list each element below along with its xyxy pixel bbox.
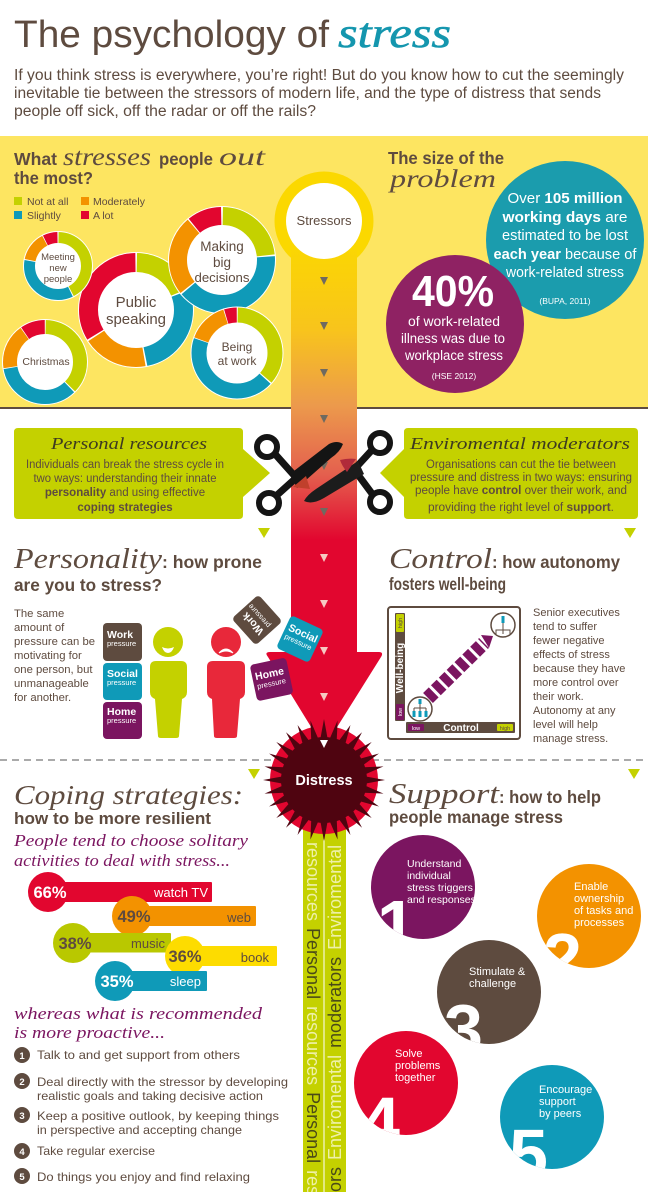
text: solitary activities: People tend to choose solitary [13,831,249,850]
legend: Not at all [27,196,68,208]
intro text: If you think stress is everywhere, you’re right! But do you know how to cut the seemingly [14,67,624,84]
panel: personal resources: Individuals can break the stress cycle in [26,459,224,471]
list: recommended actions: 4 [19,1147,25,1158]
bar: book 36%: book [241,950,269,965]
heading: coping strategies [14,780,243,828]
heading: personality: are you to stress? [14,575,162,595]
circle 1: triggers: and responses [407,894,476,906]
callout: 40% of work-related illness [386,255,524,393]
panel: personal resources: personality and using effective [45,487,205,499]
bar: watch TV 66%: watch TV [153,885,208,900]
donut: public speaking [78,252,194,368]
circle 2: ownership: 2 [543,919,582,997]
circle 1: triggers: individual [407,870,451,882]
donut: meeting new people: Meeting [41,252,75,263]
heading: support: : how to help [499,787,601,807]
circle 3: stimulate [437,940,541,1044]
heading: what stresses people out: out [219,144,267,171]
text: autonomy explanation: their work. [533,691,584,703]
circle 2: ownership: ownership [574,893,624,905]
heading: control: fosters well-being [389,574,506,594]
circle 4: solve problems: together [395,1072,436,1084]
list: recommended actions: Keep a positive outlook, by keeping things [37,1109,279,1123]
callout: 105 million working days [486,161,644,319]
heading: support: Support [389,778,500,810]
legend: Slightly [27,210,62,222]
bar: sleep 35%: sleep [170,974,201,989]
icon: scissors [257,433,390,513]
circle 5: peers: support [539,1096,576,1108]
callout: 40% of work-related illness: 40% [412,267,494,316]
circle 5: peers: 5 [509,1115,548,1192]
donut: christmas: Christmas [22,356,70,368]
text: autonomy explanation: fewer negative [533,635,605,647]
heading: personality: Personality [13,543,162,575]
heading: the size of the problem: problem [387,166,496,193]
text: autonomy explanation: because they have [533,663,625,675]
pressure blocks falling: Work [240,610,266,637]
panel: personal resources: coping strategies [77,502,173,514]
bar chart: coping activities [28,872,277,1001]
callout: 105 million working days: working days are [501,210,628,226]
bar: book 36% [165,936,277,976]
donut: meeting new people: new [49,263,67,274]
donut: making big decisions: decisions [194,270,250,285]
callout: 105 million working days: each year because of [494,247,637,263]
circle 1: triggers: stress triggers [407,882,473,894]
panel: environmental moderators: providing the right level of support. [428,502,614,514]
panel: environmental moderators: Organisations can cut the tie between [426,459,616,471]
text: autonomy explanation: more control over [533,677,619,689]
pressure blocks falling: Social [286,622,320,646]
text: pressure explanation: The same [14,608,64,620]
heading: what stresses people out: the most? [14,168,93,188]
circle 2: ownership: Enable [574,881,608,893]
circle 4: solve problems: problems [395,1060,441,1072]
text: autonomy explanation: Senior executives [533,607,620,619]
arrow: stressors to distress: Stressors [297,213,352,228]
text: solitary activities: activities to deal with stress... [14,851,230,870]
callout: 105 million working days: Over 105 million [508,191,622,207]
circle 2: ownership: processes [574,917,625,929]
heading: what stresses people out: stresses [63,144,151,171]
donut: public speaking: speaking [106,311,166,328]
text: pressure explanation: amount of [14,622,65,634]
legend: A lot [93,210,114,222]
donut: meeting new people: people [44,274,72,285]
donut: making big decisions [168,206,276,314]
circle 3: stimulate: 3 [444,990,483,1068]
pressure blocks falling: Home [254,665,285,683]
panel: personal resources: two ways: understanding their innate [34,473,216,485]
donut: being at work: Being [222,340,252,354]
panel: yellow background [0,136,648,408]
heading: support: people manage stress [389,807,563,827]
bar: web 49%: 49% [117,908,151,926]
list: recommended actions: 2 [19,1077,25,1088]
legend: Moderately [93,196,146,208]
banner: resources and moderators: ors Enviromental moderators Enviromental [325,845,345,1192]
text: pressure explanation: for another. [14,692,71,704]
text: autonomy explanation [533,607,625,745]
list: recommended actions [14,1047,288,1184]
dashed divider [0,759,648,761]
text: recommended: is more proactive... [14,1023,165,1042]
donut: making big decisions: Making [200,239,244,254]
circle 5: peers [500,1065,604,1169]
chart: control vs well-being [388,607,520,739]
title [14,11,451,57]
donut: making big decisions: big [213,255,231,270]
bar: sleep 35%: 35% [100,973,134,991]
text: pressure explanation: pressure can be [14,636,95,648]
chart: control vs well-being: low [398,708,404,716]
bar: web 49%: web [226,910,251,925]
intro text: people off sick, off the radar or off the rails? [14,103,316,120]
text: pressure explanation: unmanageable [14,678,89,690]
chart: control vs well-being: Control [443,723,479,734]
circle 4: solve problems: Solve [395,1048,423,1060]
circle 1: triggers: 1 [377,886,416,964]
text: pressure explanation: one person, but [14,664,93,676]
circle 3: stimulate: Stimulate & [469,966,526,978]
circle 1: triggers [371,835,475,939]
intro text [14,67,624,120]
donut: public speaking: Public [116,294,157,311]
intro text: inevitable tie between the stressors of modern life, and the type of distress that sends [14,85,601,102]
list: recommended actions: Take regular exercise [37,1144,155,1158]
chart: control vs well-being: high [398,618,404,628]
icon: section markers [248,528,640,779]
heading: control [389,543,620,594]
text: autonomy explanation: manage stress. [533,733,608,745]
text: autonomy explanation: Autonomy at any [533,705,616,717]
text: pressure explanation: motivating for [14,650,82,662]
circle 3: stimulate: challenge [469,978,516,990]
title: The psychology of [14,14,329,56]
circle 5: peers: Encourage [539,1084,592,1096]
text: autonomy explanation: effects of stress [533,649,610,661]
pressure blocks falling [232,595,324,701]
circle 2: ownership [537,864,641,968]
text: recommended [14,1004,263,1042]
bar: music 38% [53,923,171,963]
bar: sleep 35% [95,961,207,1001]
heading: coping strategies: Coping strategies: [14,780,243,810]
text: autonomy explanation: tend to suffer [533,621,597,633]
circle 4: solve problems: 4 [361,1083,400,1161]
pressure blocks falling: pressure [283,632,313,652]
pressure blocks falling: pressure [256,676,287,691]
list: recommended actions: in perspective and accepting change [37,1123,242,1137]
heading: personality [13,543,262,595]
bar: music 38%: 38% [58,935,92,953]
heading: what stresses people out: What [14,149,57,169]
arrow: stressors to distress [266,172,382,748]
callout: 105 million working days: (BUPA, 2011) [539,296,591,306]
heading: the size of the problem [387,148,504,193]
pressure blocks stacked [103,623,142,739]
callout: 40% of work-related illness: illness was due to [401,331,505,346]
heading: personality: : how prone [162,552,262,572]
text: recommended: whereas what is recommended [14,1004,263,1023]
pressure blocks stacked: pressure [107,639,136,648]
list: recommended actions: 3 [19,1111,25,1122]
chart: control vs well-being: low [412,726,420,732]
title: stress [338,11,451,57]
donut: being at work [190,306,284,400]
heading: control: : how autonomy [492,552,620,572]
panel: environmental moderators [380,428,638,519]
icon: distress burst [263,719,385,841]
pressure blocks stacked: Work [107,629,133,641]
icon: happy person [150,627,187,738]
pressure blocks stacked: pressure [107,716,136,725]
heading: what stresses people out [14,144,267,188]
callout: 40% of work-related illness: of work-related [408,314,500,329]
circle 2: ownership: of tasks and [574,905,633,917]
list: recommended actions: realistic goals and taking decisive action [37,1089,263,1103]
chart: control vs well-being: Well-being [395,643,406,693]
callout: 105 million working days: work-related stress [505,265,624,281]
panel: environmental moderators: Enviromental moderators [409,434,630,453]
heading: what stresses people out: people [159,149,213,169]
donut: being at work: at work [218,354,257,368]
heading: support [389,778,601,827]
panel: personal resources: Personal resources [50,434,207,453]
heading: control: Control [389,543,492,575]
callout: 40% of work-related illness: (HSE 2012) [432,371,476,381]
chart: control vs well-being: high [500,726,510,732]
icon: stressed person [207,627,245,738]
legend [14,196,146,222]
heading: coping strategies: how to be more resilient [14,810,212,828]
list: recommended actions: 1 [19,1051,25,1062]
bar: watch TV 66%: 66% [33,884,67,902]
donut: meeting new people [23,231,93,301]
circle 1: triggers: Understand [407,858,461,870]
panel: environmental moderators: pressure and distress in two ways: ensuring [410,472,632,484]
icon: distress burst: Distress [295,773,353,789]
bar: music 38%: music [131,936,165,951]
callout: 105 million working days: estimated to be lost [502,228,628,244]
arrow markers [320,277,328,701]
heading: the size of the problem: The size of the [388,148,504,168]
pressure blocks falling: pressure [246,602,272,630]
list: recommended actions: Talk to and get support from others [37,1048,240,1062]
circle 4: solve problems [354,1031,458,1135]
pressure blocks stacked: Social [107,668,138,680]
bar: watch TV 66% [28,872,212,912]
panel: personal resources [14,428,270,519]
text: autonomy explanation: level will help [533,719,598,731]
bar: web 49% [112,896,256,936]
bar: book 36%: 36% [168,948,202,966]
panel: environmental moderators: people have control over their work, and [415,485,627,497]
text: pressure explanation [14,608,95,704]
pressure blocks stacked: pressure [107,678,136,687]
circle 5: peers: by peers [539,1108,582,1120]
list: recommended actions: 5 [19,1172,25,1183]
banner: resources and moderators [303,825,346,1192]
text: solitary activities [13,831,249,870]
donut: christmas [2,319,88,405]
list: recommended actions: Deal directly with the stressor by developing [37,1075,288,1089]
list: recommended actions: Do things you enjoy and find relaxing [37,1170,250,1184]
pressure blocks stacked: Home [107,706,136,718]
callout: 40% of work-related illness: workplace stress [404,348,503,363]
